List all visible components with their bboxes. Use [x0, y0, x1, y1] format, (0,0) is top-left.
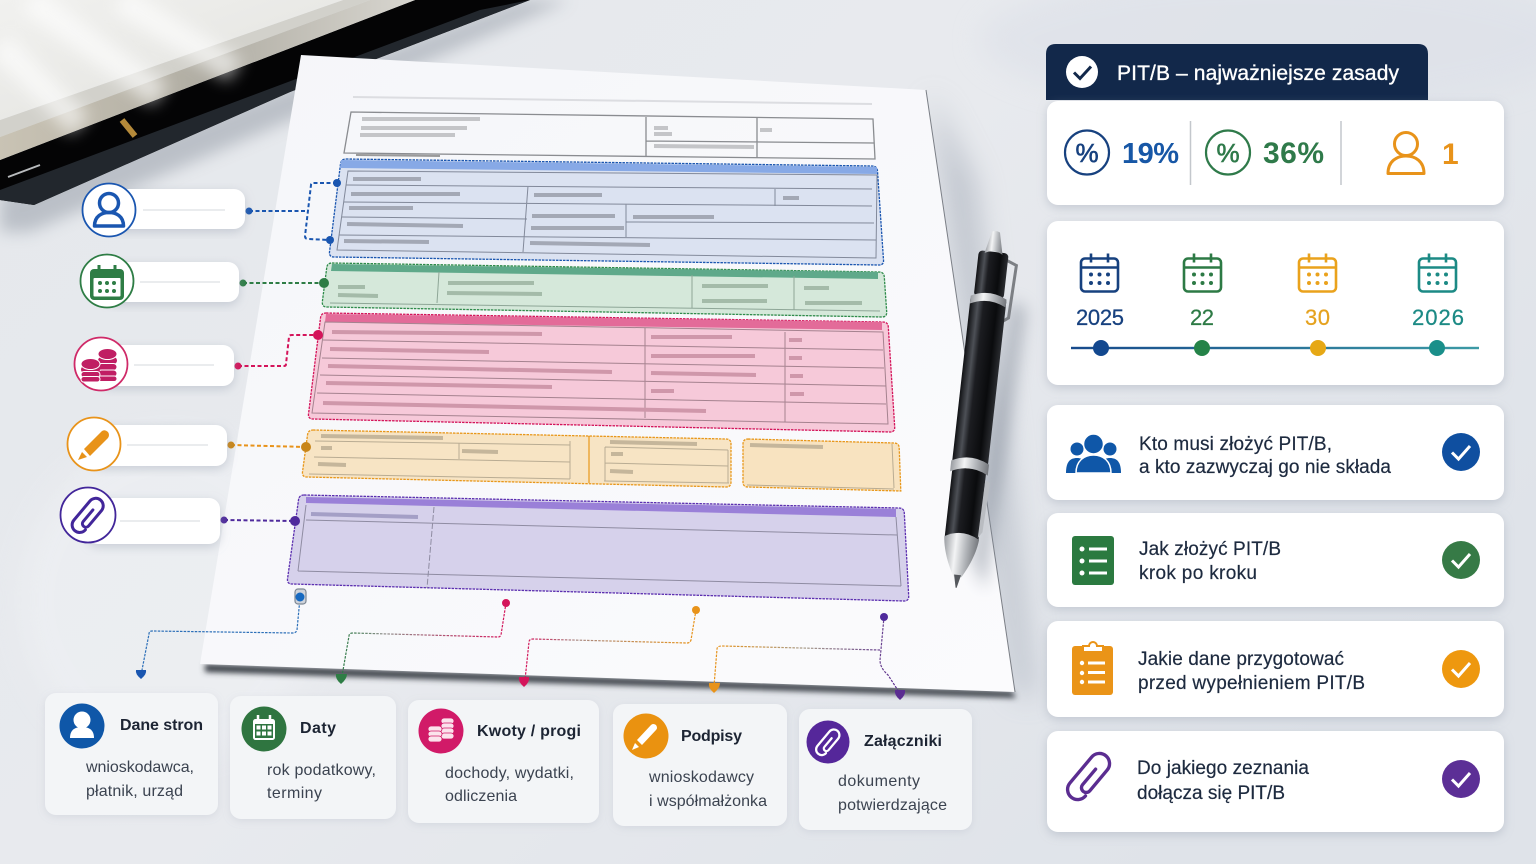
icon: paperclip [69, 495, 106, 536]
section: pink, amounts [308, 313, 895, 432]
bottom card: parties: Dane stron [120, 717, 203, 734]
icon: people [1066, 434, 1121, 473]
icon: calendar yellow [1299, 254, 1336, 292]
bottom card: dates: Daty [300, 720, 336, 737]
icon: percent green [1206, 130, 1250, 174]
section: orange, signatures [302, 430, 901, 491]
icon: calendar teal [1419, 254, 1456, 292]
title tab [1046, 44, 1428, 100]
pen clip [1000, 260, 1017, 324]
icon: person badge [60, 704, 104, 748]
bottom card: signatures: wnioskodawcy [648, 769, 754, 786]
item: data to prepare: przed wypełnieniem PIT/B [1138, 673, 1365, 694]
paper form [200, 55, 1015, 692]
pen barrel [937, 229, 1018, 590]
bottom card: parties: wnioskodawca, [85, 759, 194, 776]
left tag: parties [82, 184, 245, 236]
bottom card: dates: rok podatkowy, [267, 762, 376, 779]
section: purple, attachments [287, 495, 909, 601]
icon: calendar green [1184, 254, 1221, 292]
panel: timeline [1047, 221, 1504, 385]
item: who must file [1047, 405, 1504, 500]
left tag: dates [80, 254, 239, 308]
bottom card: amounts: Kwoty / progi [477, 723, 581, 740]
bottom card: attachments: dokumenty [838, 773, 920, 790]
left tag: attachments [60, 488, 220, 544]
bottom card: parties: płatnik, urząd [86, 783, 183, 800]
item: who must file: a kto zazwyczaj go nie składa [1139, 457, 1391, 478]
bottom card: parties [45, 693, 218, 815]
panel: timeline: 22 [1190, 305, 1214, 330]
paper shadow [205, 92, 1035, 700]
icon: pencil badge [624, 714, 668, 758]
panel: rates [1047, 101, 1504, 205]
icon: calendar badge [242, 706, 286, 752]
check: purple [1442, 760, 1480, 798]
panel: timeline: 2026 [1412, 305, 1464, 330]
bottom card: attachments: Załączniki [864, 733, 942, 750]
icon: clipboard [1072, 642, 1113, 695]
left tag: amounts [74, 338, 234, 390]
top form box [344, 112, 875, 159]
pen [937, 229, 1026, 590]
item: attachment: dołącza się PIT/B [1137, 783, 1285, 804]
connectors: left column [220, 179, 341, 526]
bottom card: amounts [408, 700, 599, 823]
icon: calendar [90, 265, 124, 300]
panel: timeline: 30 [1305, 305, 1330, 330]
item: how to file [1047, 513, 1504, 607]
item: data to prepare [1047, 621, 1504, 717]
bottom card: signatures: i współmałżonka [649, 793, 767, 810]
bottom card: attachments [799, 709, 972, 830]
check: blue [1442, 433, 1480, 471]
left tag: signatures [68, 418, 227, 470]
bottom card: dates [230, 696, 396, 819]
item: how to file: Jak złożyć PIT/B [1139, 539, 1281, 560]
panel: timeline: 2025 [1076, 305, 1124, 330]
item: how to file: krok po kroku [1139, 563, 1257, 584]
panel: rates: 1 [1442, 138, 1459, 171]
icon: coins badge [418, 708, 464, 754]
section: blue, parties [329, 159, 884, 265]
icon: pencil [78, 430, 109, 460]
icon: percent blue: % [1075, 138, 1099, 168]
icon: title check [1066, 56, 1098, 88]
check: green [1442, 541, 1480, 579]
title tab: PIT/B – najważniejsze zasady [1117, 62, 1400, 85]
icon: person orange [1388, 132, 1424, 174]
binder with pages, top left [0, 0, 570, 232]
timeline line [1071, 340, 1479, 356]
item: attachment [1047, 731, 1504, 832]
bottom card: dates: terminy [267, 785, 322, 802]
icon: list [1072, 536, 1114, 585]
panel: rates: 19% [1122, 138, 1179, 170]
item: attachment: Do jakiego zeznania [1137, 758, 1309, 779]
bottom card: attachments: potwierdzające [838, 797, 947, 814]
icon: coins [81, 348, 117, 382]
item: data to prepare: Jakie dane przygotować [1138, 649, 1344, 670]
section: green, dates [322, 263, 887, 317]
bottom card: amounts: odliczenia [445, 788, 517, 805]
icon: paperclip badge [806, 720, 850, 764]
check: orange [1442, 650, 1480, 688]
bottom card: signatures [613, 704, 787, 826]
icon: calendar navy [1081, 254, 1118, 292]
icon: large paperclip [1063, 749, 1114, 804]
icon: percent green: % [1216, 138, 1240, 168]
icon: percent blue [1065, 130, 1109, 174]
panel: rates: 36% [1263, 137, 1324, 170]
bottom card: amounts: dochody, wydatki, [445, 765, 574, 782]
icon: person [94, 194, 124, 226]
item: who must file: Kto musi złożyć PIT/B, [1139, 434, 1332, 455]
connectors: bottom row [136, 589, 905, 700]
bottom card: signatures: Podpisy [681, 728, 742, 745]
